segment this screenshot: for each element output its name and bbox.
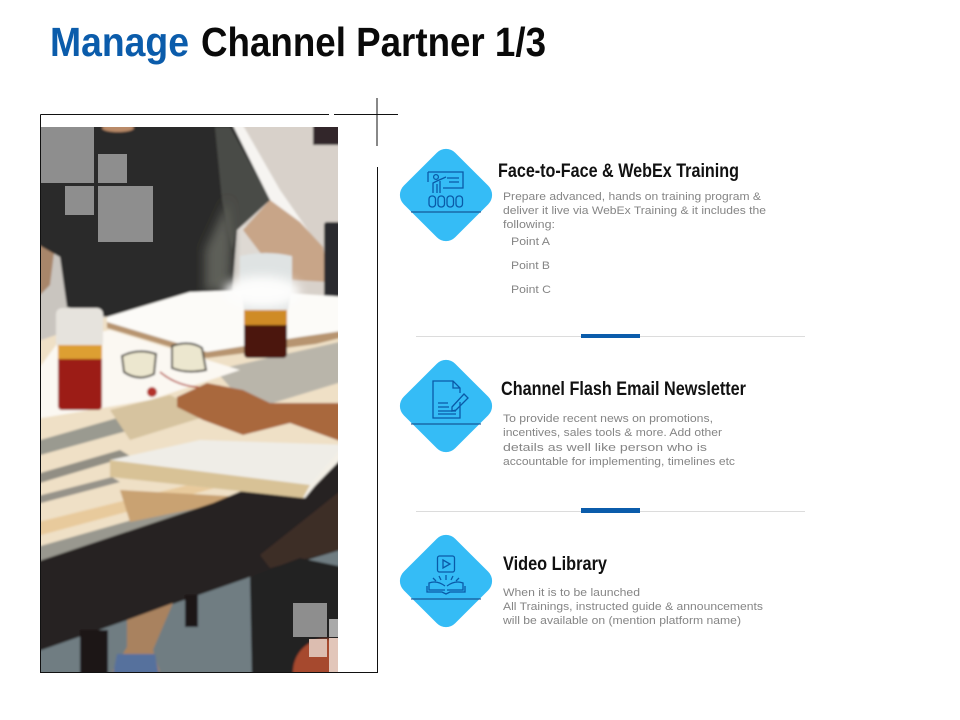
description: To provide recent news on promotions, [503,413,713,425]
heading: Face-to-Face & WebEx Training [498,160,739,182]
divider 1 [416,334,805,338]
divider 2 [416,508,805,513]
item: Video Library [395,530,764,632]
title: Channel Partner 1/3 [201,19,546,65]
description: incentives, sales tools & more. Add other [503,427,722,439]
description: accountable for implementing, timelines etc [503,456,736,468]
icon: video over open book on diamond [395,530,497,632]
description: details as well like person who is [503,442,708,454]
icon: trainer with audience on diamond [395,144,497,246]
decorative squares bottom-right of photo [293,603,338,672]
title [50,19,546,65]
item: Channel Flash Email Newsletter [395,355,746,468]
decorative squares top-left of photo [40,127,153,242]
description: will be available on (mention platform name) [502,615,741,627]
description: deliver it live via WebEx Training & it includes the [503,205,766,217]
description: Prepare advanced, hands on training program & [503,191,762,203]
heading: Channel Flash Email Newsletter [501,378,746,400]
description: When it is to be launched [503,587,640,599]
photo: people working at a wooden table [41,127,338,672]
description [502,587,764,627]
description: Point A [511,236,551,248]
description [503,191,766,296]
description: All Trainings, instructed guide & announcements [503,601,764,613]
title: Manage [50,19,189,65]
photo frame lines [40,98,398,672]
description: Point C [511,284,551,296]
icon: document and pencil on diamond [395,355,497,457]
description: Point B [511,260,550,272]
item: Face-to-Face & WebEx Training [395,144,766,296]
heading: Video Library [503,553,607,575]
description [503,413,736,468]
description: following: [503,219,555,231]
